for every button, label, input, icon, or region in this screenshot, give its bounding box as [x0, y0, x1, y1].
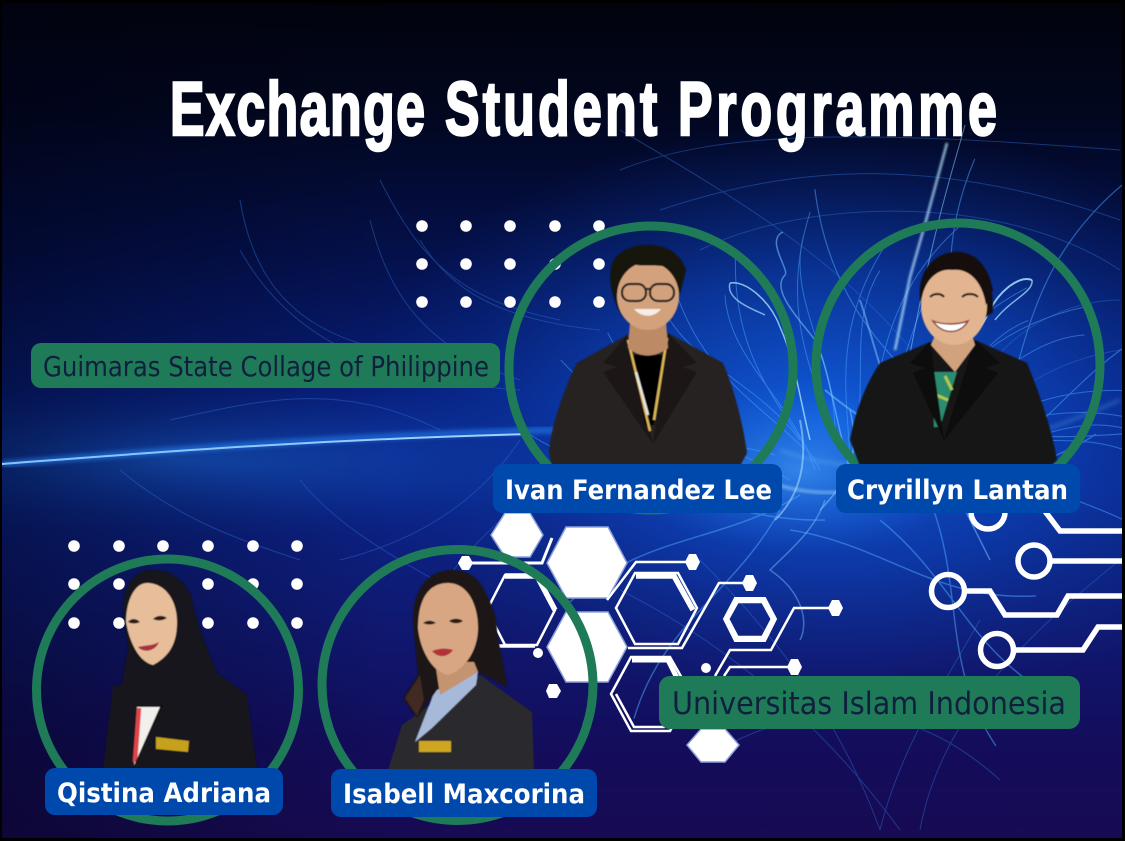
portrait: Cryrillyn Lantan	[850, 252, 1057, 466]
name tag: Cryrillyn Lantan	[836, 464, 1080, 513]
portrait: Qistina Adriana	[103, 570, 257, 770]
name tag: Cryrillyn Lantan: Cryrillyn Lantan	[847, 475, 1068, 506]
label: Guimaras State Collage of Philippine: Guimaras State Collage of Philippine	[43, 350, 489, 383]
name tag: Ivan Fernandez Lee	[493, 464, 782, 513]
portrait: Isabell Maxcorina	[388, 570, 534, 770]
portrait: Ivan Fernandez Lee	[549, 245, 747, 466]
label: Universitas Islam Indonesia: Universitas Islam Indonesia	[672, 686, 1066, 722]
name tag: Qistina Adriana: Qistina Adriana	[57, 778, 271, 809]
decoration: white dot grid bottom	[68, 540, 303, 629]
portrait ring: Cryrillyn	[816, 223, 1100, 507]
title: Student	[445, 66, 657, 151]
name tag: Qistina Adriana	[45, 768, 283, 815]
decoration: right circuit traces	[932, 495, 1122, 666]
name tag: Isabell Maxcorina: Isabell Maxcorina	[343, 779, 585, 810]
portrait ring: Isabell	[322, 550, 593, 820]
title: Programme	[678, 66, 997, 151]
decoration: white dot grid top	[416, 220, 605, 308]
title: Exchange	[170, 66, 425, 151]
label: Guimaras State Collage of Philippine	[31, 343, 500, 388]
name tag: Ivan Fernandez Lee: Ivan Fernandez Lee	[505, 475, 772, 506]
decoration: hexagon circuit cluster	[458, 513, 843, 762]
name tag: Isabell Maxcorina	[331, 769, 597, 817]
portrait ring: Qistina	[36, 559, 298, 821]
portrait ring: Ivan	[509, 226, 793, 510]
title	[170, 66, 997, 151]
label: Universitas Islam Indonesia	[659, 676, 1080, 729]
